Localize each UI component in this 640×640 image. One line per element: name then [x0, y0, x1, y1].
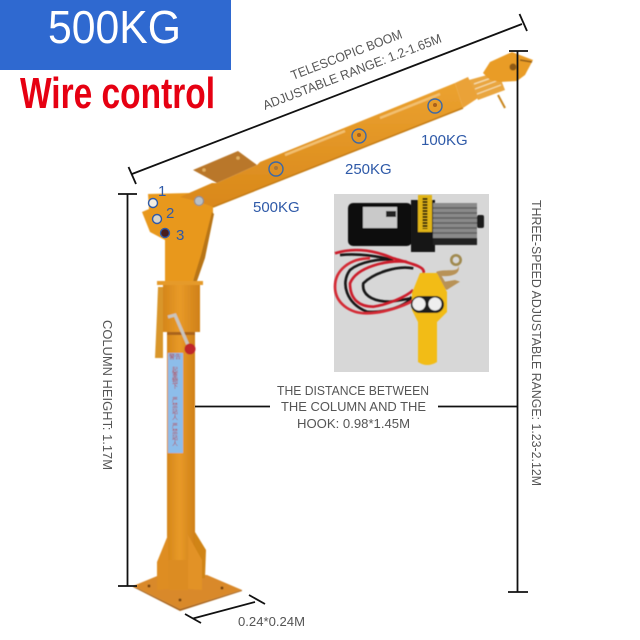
title banner: 500KG	[0, 0, 231, 70]
warning sticker	[168, 353, 183, 453]
winch photo panel	[334, 194, 489, 372]
pivot bolt	[194, 196, 204, 206]
boom end pin	[498, 95, 505, 108]
head bracket	[142, 193, 214, 281]
warning sticker: 起	[172, 366, 178, 374]
warning sticker: 禁	[172, 429, 178, 436]
column height label: COLUMN HEIGHT: 1.17M	[100, 320, 115, 470]
warning sticker: 严	[172, 397, 178, 404]
distance label	[277, 383, 429, 431]
winch drum	[411, 195, 484, 252]
adjustment holes 1 2 3	[148, 183, 184, 244]
boom position markers	[269, 99, 442, 176]
base plate	[133, 574, 242, 611]
boom label: TELESCOPIC BOOM	[289, 27, 404, 83]
hook head plate	[483, 52, 533, 82]
dimension line: telescopic boom	[128, 14, 527, 184]
distance label: THE DISTANCE BETWEEN	[277, 383, 429, 398]
gussets	[157, 532, 206, 590]
warning sticker: 人	[172, 415, 178, 422]
load labels: 250KG	[345, 161, 392, 178]
mounting plate	[193, 151, 257, 183]
crank handle	[168, 315, 196, 354]
warning sticker: 重	[172, 372, 178, 380]
column	[167, 330, 195, 580]
boom label: ADJUSTABLE RANGE: 1.2-1.65M	[261, 31, 443, 113]
load labels: 100KG	[421, 132, 468, 149]
distance label: HOOK: 0.98*1.45M	[297, 416, 410, 431]
warning sticker: 下	[172, 384, 178, 390]
three-speed range label: THREE-SPEED ADJUSTABLE RANGE: 1.23-2.12M	[529, 200, 544, 486]
load labels	[253, 132, 468, 216]
adjustment holes 1 2 3: 1	[158, 183, 166, 200]
warning sticker: 站	[172, 408, 178, 416]
wired remote control	[411, 273, 447, 365]
boom	[180, 72, 505, 207]
heading: Wire control: Wire control	[20, 69, 215, 118]
power cables	[335, 250, 424, 313]
warning sticker: 严	[172, 423, 178, 430]
adjustment holes 1 2 3: 2	[166, 205, 174, 222]
load labels: 500KG	[253, 199, 300, 216]
dimension line: three-speed range	[508, 51, 528, 592]
warning sticker: 站	[172, 434, 178, 442]
distance label: THE COLUMN AND THE	[281, 399, 426, 414]
warning sticker: 禁	[172, 403, 178, 410]
hook	[433, 255, 461, 290]
dimension line: base plate	[185, 595, 265, 623]
adjustment holes 1 2 3: 3	[176, 227, 184, 244]
title banner: 500KG: 500KG	[48, 1, 181, 53]
column sleeve	[157, 281, 203, 335]
base plate label: 0.24*0.24M	[238, 615, 305, 629]
hanging lever	[155, 287, 163, 358]
warning sticker: 人	[172, 441, 178, 448]
warning sticker: 物	[172, 377, 178, 385]
crane illustration	[133, 52, 533, 611]
winch motor	[348, 203, 412, 246]
dimension line: column height	[118, 194, 137, 586]
warning sticker: 警告	[169, 353, 181, 361]
dimension line: column to hook distance	[195, 406, 518, 408]
